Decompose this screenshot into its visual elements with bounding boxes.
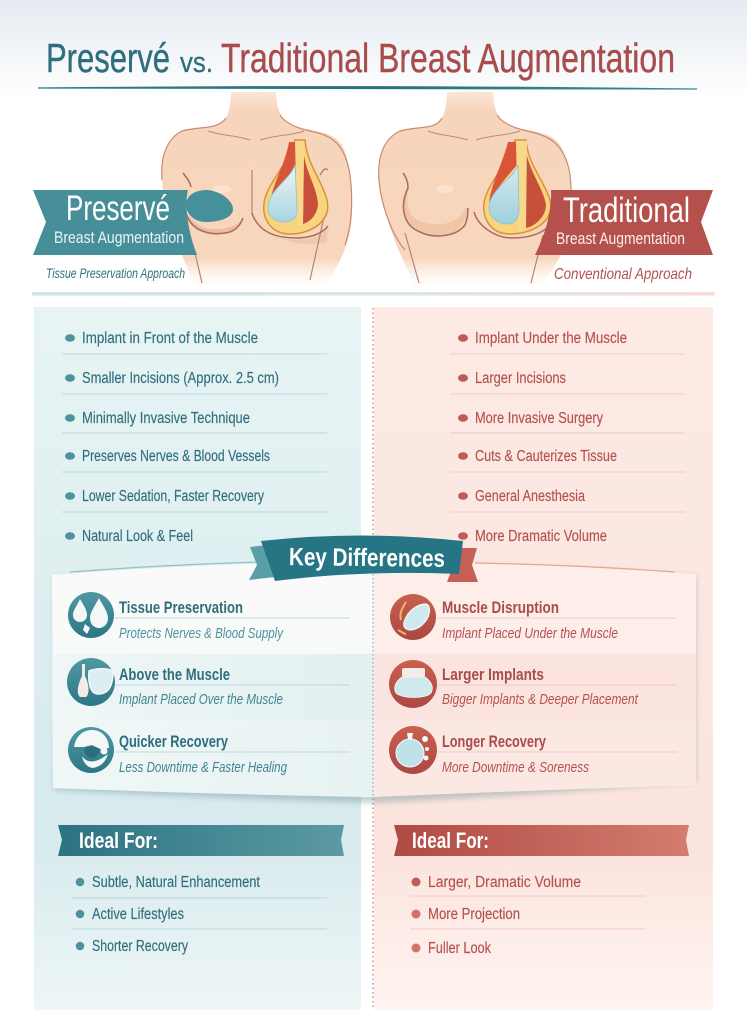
row: Tissue Preservation	[68, 592, 350, 642]
list: traditional features	[450, 330, 685, 545]
list: ideal for traditional	[410, 874, 645, 957]
title	[46, 35, 675, 81]
illustration: traditional torso	[379, 92, 572, 285]
title: Preservé	[46, 35, 170, 81]
icon: implant above muscle	[67, 658, 115, 706]
illustration: preserve torso	[162, 92, 352, 285]
list: ideal for preserve: Subtle, Natural Enhancement	[92, 874, 261, 891]
row: Tissue Preservation: Tissue Preservation	[119, 599, 243, 617]
banner: Ideal For preserve	[58, 825, 344, 856]
breast marker: preserve implant area	[186, 190, 233, 222]
row: Longer Recovery	[389, 726, 677, 776]
row: Quicker Recovery: Quicker Recovery	[119, 733, 229, 751]
row: Quicker Recovery	[68, 727, 350, 776]
icon: larger implant	[389, 660, 437, 708]
list: preserve features: Minimally Invasive Technique	[82, 410, 250, 427]
caption: Conventional Approach: Conventional Approach	[554, 266, 692, 283]
icon: tissue drops	[68, 592, 114, 638]
row: Larger Implants	[389, 660, 677, 708]
list: traditional features: Larger Incisions	[475, 370, 566, 387]
icon: recovery umbrella	[68, 727, 114, 773]
list: traditional features: More Dramatic Volume	[475, 528, 607, 545]
implant cross-section: preserve	[264, 140, 328, 234]
list: traditional features: Cuts & Cauterizes Tissue	[475, 448, 617, 465]
row: Above the Muscle: Above the Muscle	[119, 666, 230, 684]
ribbon: Preservé	[33, 189, 197, 255]
list: preserve features: Lower Sedation, Faster Recovery	[82, 488, 264, 505]
row: Muscle Disruption	[390, 594, 677, 642]
ribbon: Traditional: Breast Augmentation	[556, 229, 685, 248]
title: vs.	[180, 47, 213, 79]
list: ideal for preserve: Active Lifestyles	[92, 906, 184, 923]
ribbon: Traditional	[535, 190, 713, 255]
list: ideal for preserve	[72, 874, 327, 955]
row: Above the Muscle: Implant Placed Over the Muscle	[119, 692, 283, 708]
list: preserve features: Smaller Incisions (Approx. 2.5 cm)	[82, 370, 279, 387]
list: ideal for traditional: Larger, Dramatic Volume	[428, 874, 581, 891]
row: Larger Implants: Bigger Implants & Deeper Placement	[442, 692, 639, 708]
list: preserve features: Preserves Nerves & Blood Vessels	[82, 448, 270, 465]
row: Above the Muscle	[67, 658, 350, 708]
row: Quicker Recovery: Less Downtime & Faster Healing	[119, 760, 287, 776]
row: Muscle Disruption: Implant Placed Under the Muscle	[442, 626, 618, 642]
ribbon: Preservé: Breast Augmentation	[54, 228, 184, 247]
list: preserve features	[62, 330, 327, 545]
list: ideal for traditional: Fuller Look	[428, 940, 491, 957]
row: Larger Implants: Larger Implants	[442, 666, 544, 684]
caption: Tissue Preservation Approach: Tissue Preservation Approach	[46, 265, 185, 281]
row: Longer Recovery: More Downtime & Soreness	[442, 760, 589, 776]
icon: longer recovery	[389, 726, 437, 774]
panel: preserve column	[34, 307, 361, 1010]
implant cross-section: traditional	[484, 140, 551, 234]
ribbon: Traditional: Traditional	[563, 191, 690, 230]
banner: Ideal For traditional: Ideal For:	[412, 828, 489, 853]
ribbon: Preservé: Preservé	[66, 189, 170, 228]
list: traditional features: More Invasive Surgery	[475, 410, 603, 427]
panel: traditional column	[374, 307, 713, 1010]
icon: muscle disruption	[390, 594, 436, 640]
banner: Key Differences	[249, 536, 478, 582]
list: traditional features: General Anesthesia	[475, 488, 585, 505]
row: Muscle Disruption: Muscle Disruption	[442, 599, 559, 617]
banner: Key Differences: Key Differences	[289, 543, 445, 573]
row: Tissue Preservation: Protects Nerves & Blood Supply	[119, 626, 284, 642]
banner: Ideal For preserve: Ideal For:	[79, 828, 158, 853]
list: ideal for traditional: More Projection	[428, 906, 520, 923]
banner: Ideal For traditional	[394, 825, 689, 856]
list: preserve features: Natural Look & Feel	[82, 528, 193, 545]
panel: key differences card	[52, 561, 696, 803]
list: traditional features: Implant Under the Muscle	[475, 330, 627, 347]
list: ideal for preserve: Shorter Recovery	[92, 938, 188, 955]
list: preserve features: Implant in Front of the Muscle	[82, 330, 258, 347]
row: Longer Recovery: Longer Recovery	[442, 733, 547, 751]
